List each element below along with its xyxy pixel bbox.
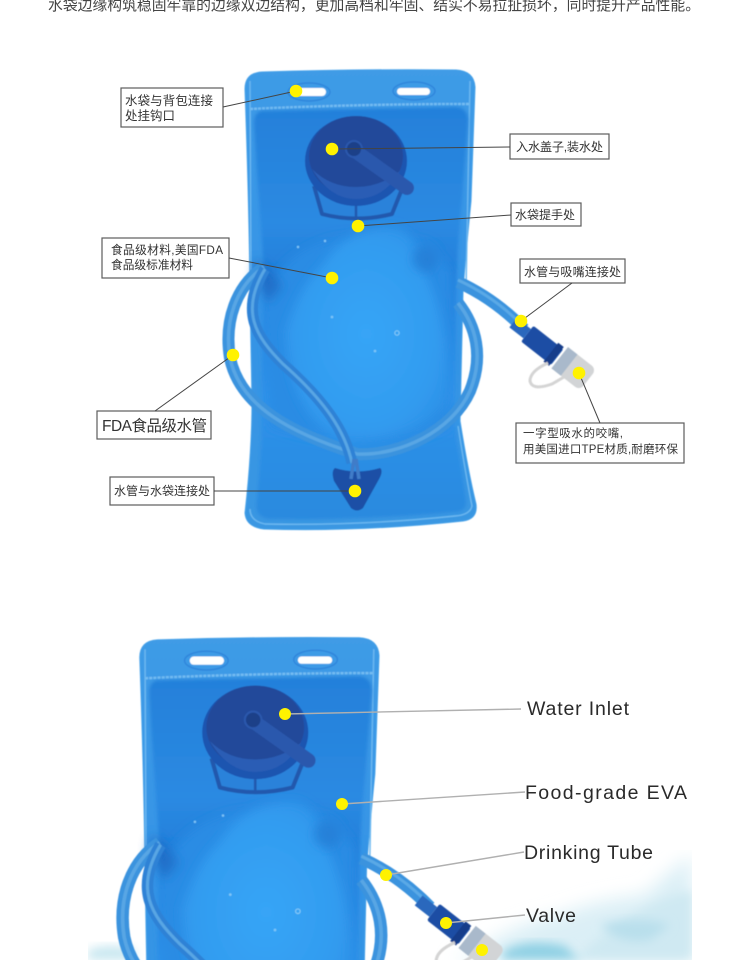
marker: mouthpiece dot: [476, 944, 488, 956]
label: Food-grade EVA: [336, 782, 687, 810]
callout: water inlet cap: [326, 134, 609, 159]
callout: FDA food grade tube: FDA食品级水管: [102, 417, 207, 435]
callout: bag handle: [352, 203, 581, 232]
label: Drinking Tube: Drinking Tube: [524, 842, 653, 864]
callout: food grade material: 食品级标准材料: [111, 258, 193, 272]
photo: hydration bladder, English labelled view: [123, 638, 505, 960]
callout: hook slot: 处挂钩口: [125, 109, 175, 123]
callout: food grade material: [102, 238, 338, 284]
callout: tube to bag joint: [110, 477, 361, 505]
label: Valve: Valve: [526, 905, 576, 927]
label: Water Inlet: Water Inlet: [527, 698, 630, 720]
callout: mouthpiece: 用美国进口TPE材质,耐磨环保: [523, 442, 678, 456]
water splash background: [88, 855, 692, 960]
label: Drinking Tube: [380, 842, 653, 881]
label: Valve: [440, 905, 576, 929]
callout: water inlet cap: 入水盖子,装水处: [516, 140, 603, 154]
callout: tube and mouthpiece joint: 水管与吸嘴连接处: [524, 264, 621, 279]
callout: tube to bag joint: 水管与水袋连接处: [114, 483, 210, 498]
photo: hydration bladder with tube, annotated view: [228, 70, 596, 530]
callout: mouthpiece: [516, 367, 684, 463]
callout: hook slot: 水袋与背包连接: [125, 93, 213, 108]
callout: tube and mouthpiece joint: [515, 259, 625, 327]
label: Food-grade EVA: Food-grade EVA: [525, 782, 687, 804]
label: Water Inlet: [279, 698, 630, 720]
callout: FDA food grade tube: [97, 349, 239, 439]
callout: bag handle: 水袋提手处: [515, 207, 575, 222]
callout: food grade material: 食品级材料,美国FDA: [111, 243, 223, 257]
callout: hook slot: [121, 85, 302, 127]
callout: mouthpiece: 一字型吸水的咬嘴,: [523, 426, 623, 440]
